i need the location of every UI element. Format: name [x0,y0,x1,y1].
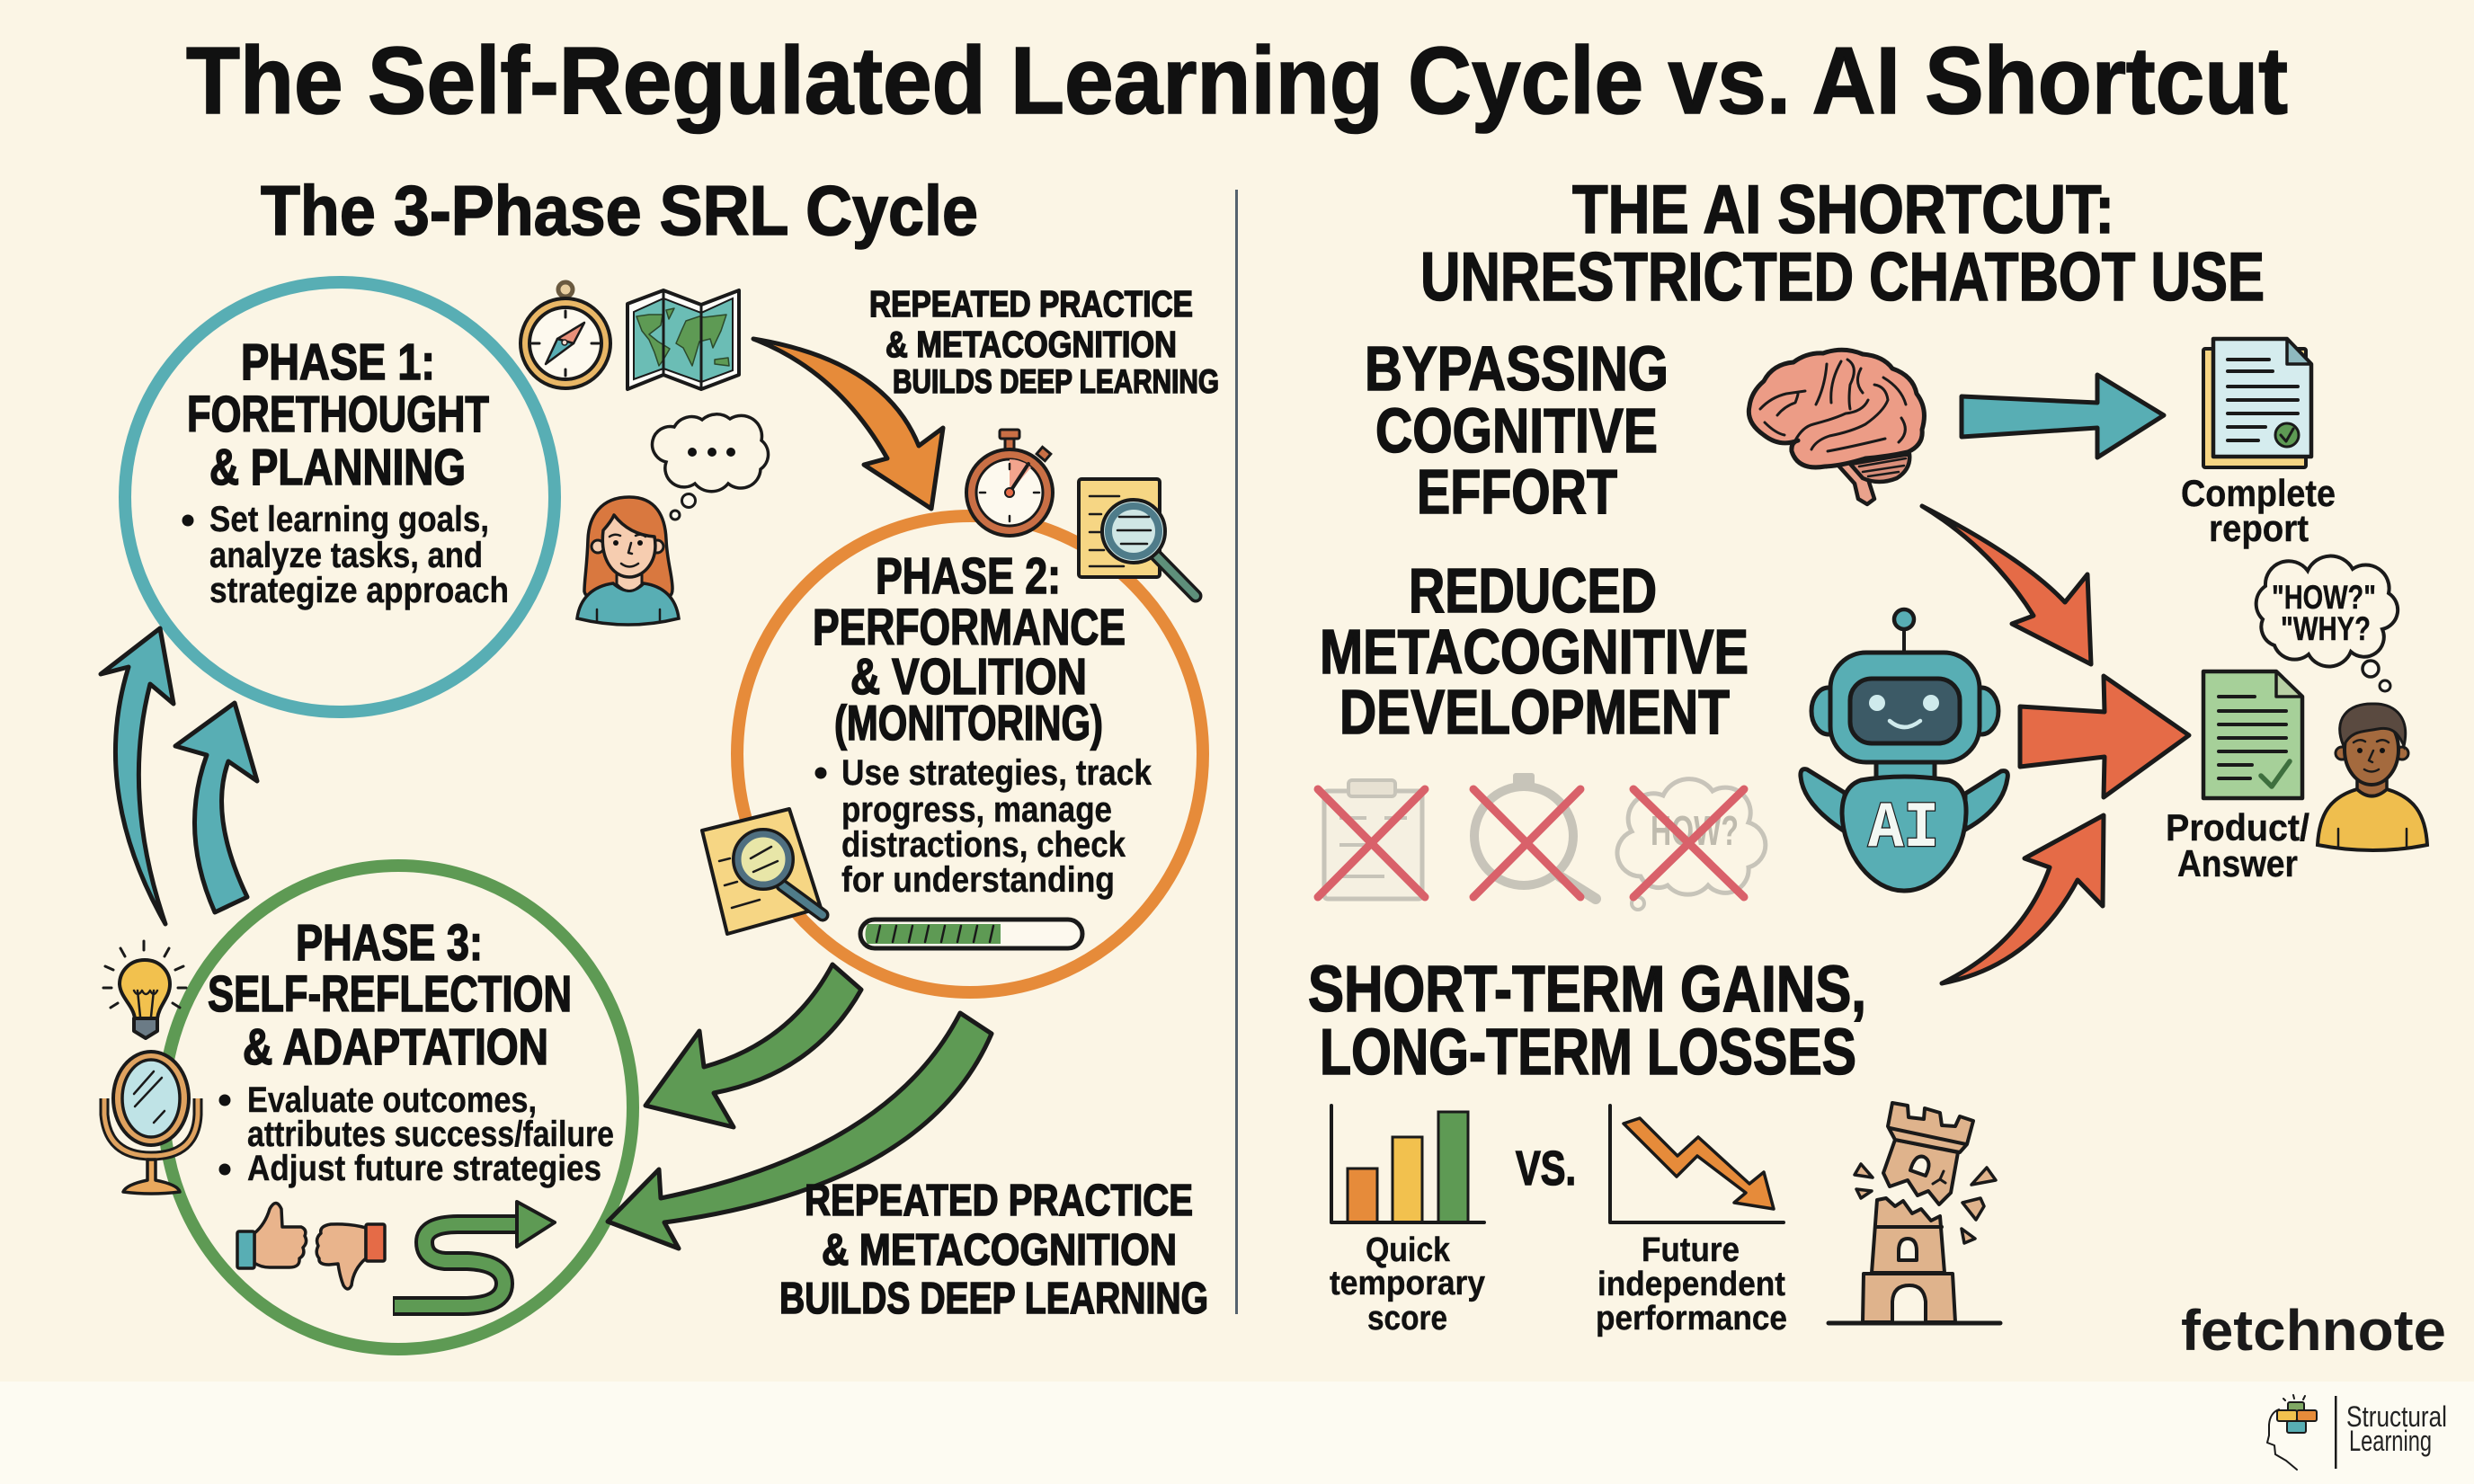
icon: brain [1749,350,1924,504]
panel: the 3-phase SRL cycle [101,171,1219,1349]
logo: structural learning: Learning [2349,1425,2432,1457]
phase 1 text: PHASE 1: [241,333,435,391]
phase 2 text: (MONITORING) [834,695,1103,751]
text: reduced metacognitive development: METACOGNITIVE [1320,617,1749,687]
text: repeated practice upper: REPEATED PRACTICE [869,283,1193,324]
icon: compass [521,282,610,388]
text: vs: VS. [1516,1142,1576,1195]
icon: crossed thought cloud [1617,779,1766,910]
phase 1 circle [125,282,555,712]
arrow: teal outer up to phase 1 [101,628,174,924]
phase 3 circle [164,866,633,1349]
text: bypassing cognitive effort: EFFORT [1417,457,1617,527]
phase 2 text: Use strategies, track [841,753,1152,793]
phase 3 text: PHASE 3: [296,914,483,972]
chart: rising bars [1331,1106,1484,1222]
icon: mirror [104,1052,198,1194]
icon: crossed stopwatch [1473,773,1596,899]
callout: how why thought cloud: "WHY? [2281,610,2371,647]
phase 2 circle [737,516,1203,992]
text: repeated practice lower: REPEATED PRACTICE [805,1177,1193,1225]
icon: crumbling tower [1829,1103,2000,1323]
phase 3 text: Evaluate outcomes, [247,1080,537,1120]
arrow: orange curved to phase 2 [753,339,943,509]
text: future independent performance: Future [1642,1231,1740,1269]
logo: structural learning [2267,1395,2447,1470]
phase 2 text: for understanding [841,860,1115,900]
text: future independent performance [1596,1231,1787,1337]
text: bypassing cognitive effort: COGNITIVE [1375,395,1658,466]
chart: falling arrow [1610,1106,1784,1222]
text: product answer [2166,806,2309,884]
icon: note with magnifier, upper [1079,479,1196,596]
text: bypassing cognitive effort [1365,333,1669,527]
arrow: red from robot [2020,676,2189,797]
text: repeated practice lower [779,1177,1208,1323]
text: reduced metacognitive development: DEVELOPMENT [1339,677,1730,747]
arrow: teal inner up to phase 1 [175,703,257,912]
callout: how why thought cloud [2256,556,2398,691]
text: quick temporary score: temporary [1330,1265,1485,1302]
icon: crossed thought cloud: HOW? [1651,807,1739,854]
heading: AI shortcut: UNRESTRICTED CHATBOT USE [1420,239,2265,315]
icon: product document [2203,671,2302,798]
heading: SRL cycle: The 3-Phase SRL Cycle [261,171,978,250]
icon: thought cloud [653,414,769,520]
phase 3 text: attributes success/failure [247,1115,614,1154]
phase 1 text: FORETHOUGHT [187,386,489,443]
icon: girl [577,497,679,625]
icon: lightbulb [103,941,186,1038]
text: complete report: report [2209,507,2309,549]
text: future independent performance: independent [1597,1266,1785,1303]
arrow: red from short-term gains [1942,815,2104,983]
icon: complete report [2203,339,2311,467]
text: short-term gains long-term losses: SHORT-TERM GAINS, [1308,954,1866,1026]
text: short-term gains long-term losses [1308,954,1866,1089]
arrow: green upper to phase 3 [645,964,861,1127]
text: short-term gains long-term losses: LONG-TERM LOSSES [1320,1017,1856,1089]
panel: the AI shortcut [1308,172,2446,1363]
icon: crossed clipboard [1318,780,1425,899]
icon: robot: AI [1868,792,1939,866]
icon: S-curve arrow [393,1202,555,1306]
wordmark: fetchnote: fetchnote [2181,1298,2446,1363]
phase 2 text: & VOLITION [850,648,1087,706]
text: quick temporary score: score [1367,1300,1447,1337]
phase 2 text: PERFORMANCE [813,599,1126,656]
text: reduced metacognitive development: REDUCED [1409,555,1657,626]
phase 2 text [813,547,1152,900]
icon: thumbs down [316,1224,385,1289]
text: future independent performance: performance [1596,1300,1787,1337]
arrow: brain to report [1962,375,2164,458]
phase 3 text: Adjust future strategies [247,1149,601,1188]
text: product answer: Answer [2177,842,2298,884]
text: repeated practice upper: & METACOGNITION [885,324,1177,365]
heading: AI shortcut [1420,172,2265,315]
icon: robot [1801,609,2007,891]
arrow: green lower to phase 3 [608,1013,992,1249]
phase 1 text [182,333,509,610]
callout: how why thought cloud: "HOW?" [2272,579,2376,616]
logo: structural learning: Structural [2346,1400,2447,1433]
text: repeated practice lower: & METACOGNITION [822,1226,1177,1275]
phase 2 text: PHASE 2: [876,547,1061,605]
phase 1 text: & PLANNING [209,439,466,496]
text: complete report: Complete [2181,472,2336,514]
phase 2 text: progress, manage [841,790,1112,830]
phase 1 text: Set learning goals, [209,500,489,539]
icon: note with magnifier, lower [702,809,823,934]
icon: map [627,290,739,389]
icon: boy [2318,704,2427,850]
heading: AI shortcut: THE AI SHORTCUT: [1572,172,2114,248]
text: quick temporary score: Quick [1366,1231,1451,1269]
text: product answer: Product/ [2166,806,2309,849]
phase 1 text: analyze tasks, and [209,536,483,575]
arrow: red from brain [1922,506,2091,664]
text: quick temporary score [1330,1231,1485,1337]
icon: stopwatch [966,430,1053,536]
phase 3 text [208,914,614,1188]
phase 3 text: SELF-REFLECTION [208,965,572,1023]
text: repeated practice upper: BUILDS DEEP LEARNING [893,363,1219,400]
text: repeated practice lower: BUILDS DEEP LEARNING [779,1275,1208,1323]
phase 3 text: & ADAPTATION [243,1018,548,1076]
phase 1 text: strategize approach [209,571,509,610]
text: bypassing cognitive effort: BYPASSING [1365,333,1669,404]
text: complete report [2181,472,2336,549]
text: repeated practice upper [869,283,1219,400]
icon: thumbs up [237,1203,307,1268]
progress bar [860,920,1082,948]
phase 2 text: distractions, check [841,825,1126,865]
title: The Self-Regulated Learning Cycle vs. AI Shortcut [186,28,2288,134]
text: reduced metacognitive development [1320,555,1749,747]
